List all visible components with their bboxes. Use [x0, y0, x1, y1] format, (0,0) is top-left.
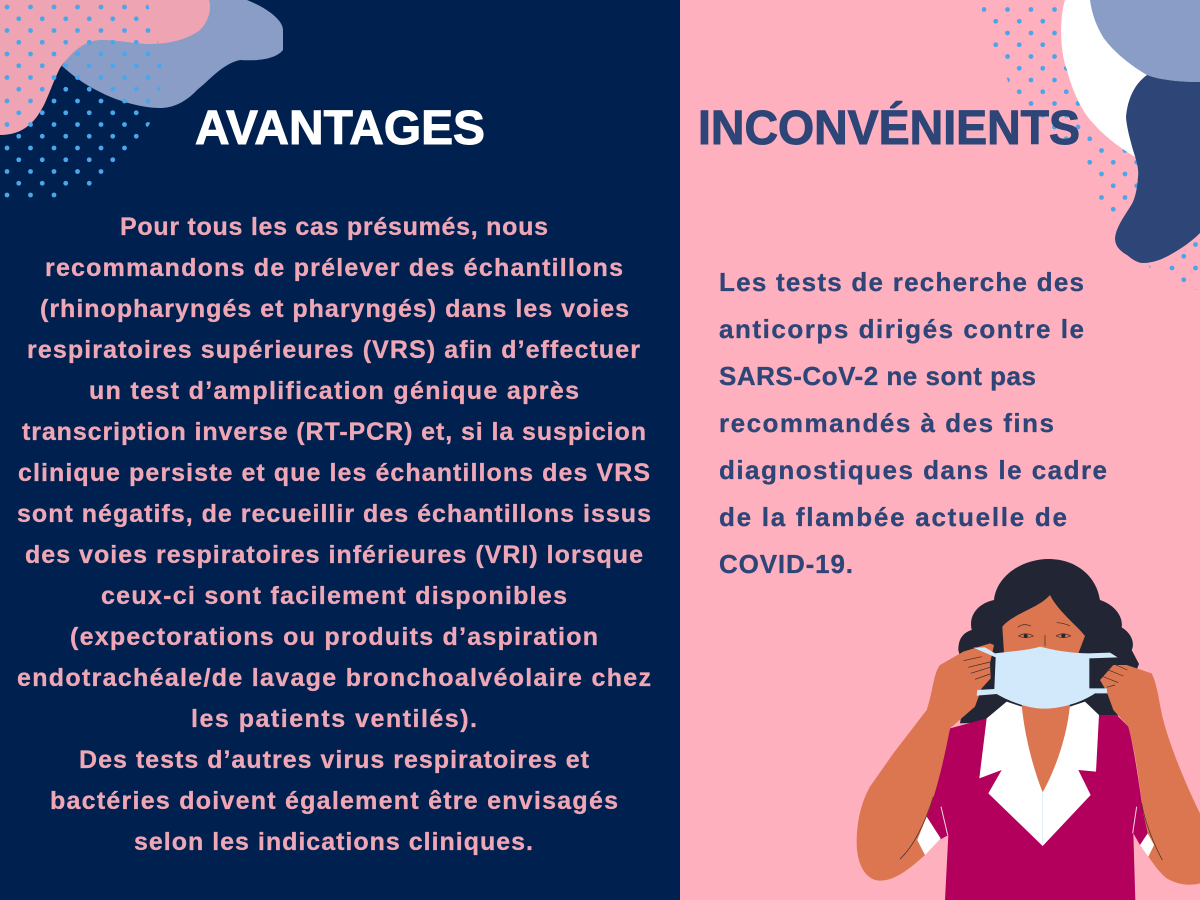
- decoration: top-right blobs: [1061, 0, 1200, 263]
- text block: inconvénients body: Les tests de recherche des: [719, 267, 1084, 297]
- hair: [958, 559, 1139, 723]
- text block: inconvénients body: recommandés à des fins: [719, 408, 1054, 438]
- text block: avantages body: respiratoires supérieures (VRS) afin d’effectuer: [27, 336, 640, 364]
- text block: avantages body: Des tests d’autres virus respiratoires et: [79, 746, 590, 774]
- panel: inconvénients background: [680, 0, 1200, 900]
- text block: avantages body: Pour tous les cas présumés, nous: [120, 213, 548, 241]
- shirt: [927, 715, 1149, 900]
- text block: avantages body: (expectorations ou produits d’aspiration: [70, 623, 598, 651]
- text block: avantages body: les patients ventilés).: [191, 705, 477, 733]
- illustration: woman putting on a mask: [857, 559, 1200, 900]
- text block: avantages body: sont négatifs, de recueillir des échantillons issus: [17, 500, 651, 528]
- text block: avantages body: transcription inverse (RT-PCR) et, si la suspicion: [22, 418, 646, 446]
- right arm: [1100, 665, 1200, 885]
- facial and hand details: [900, 623, 1162, 860]
- decoration: top-left blobs and dots: [0, 0, 283, 198]
- text block: avantages body: endotrachéale/de lavage bronchoalvéolaire chez: [17, 664, 651, 692]
- text block: inconvénients body: COVID-19.: [719, 549, 853, 579]
- text block: inconvénients body: de la flambée actuelle de: [719, 502, 1067, 532]
- face: [1002, 595, 1085, 683]
- text block: avantages body: [17, 213, 651, 856]
- neck: [1022, 705, 1070, 792]
- text block: avantages body: un test d’amplification génique après: [89, 377, 579, 405]
- text block: inconvénients body: SARS-CoV-2 ne sont pas: [719, 361, 1036, 391]
- decoration: top-right dots: [982, 0, 1200, 290]
- text block: avantages body: des voies respiratoires inférieures (VRI) lorsque: [25, 541, 643, 569]
- text block: avantages body: bactéries doivent également être envisagés: [50, 787, 618, 815]
- text block: avantages body: (rhinopharyngés et pharyngés) dans les voies: [40, 295, 629, 323]
- heading: avantages: AVANTAGES: [195, 102, 485, 155]
- heading: inconvénients: INCONVÉNIENTS: [698, 101, 1080, 155]
- panel: avantages background: [0, 0, 680, 900]
- text block: avantages body: ceux-ci sont facilement disponibles: [101, 582, 567, 610]
- left arm: [857, 643, 994, 881]
- text block: avantages body: recommandons de prélever des échantillons: [45, 254, 623, 282]
- text block: avantages body: clinique persiste et que les échantillons des VRS: [18, 459, 650, 487]
- collar: [979, 702, 1099, 846]
- cuffs: [917, 817, 1154, 857]
- text block: inconvénients body: diagnostiques dans le cadre: [719, 455, 1107, 485]
- text block: avantages body: selon les indications cliniques.: [134, 828, 533, 856]
- mask: [973, 647, 1118, 709]
- text block: inconvénients body: [719, 267, 1107, 579]
- text block: inconvénients body: anticorps dirigés contre le: [719, 314, 1084, 344]
